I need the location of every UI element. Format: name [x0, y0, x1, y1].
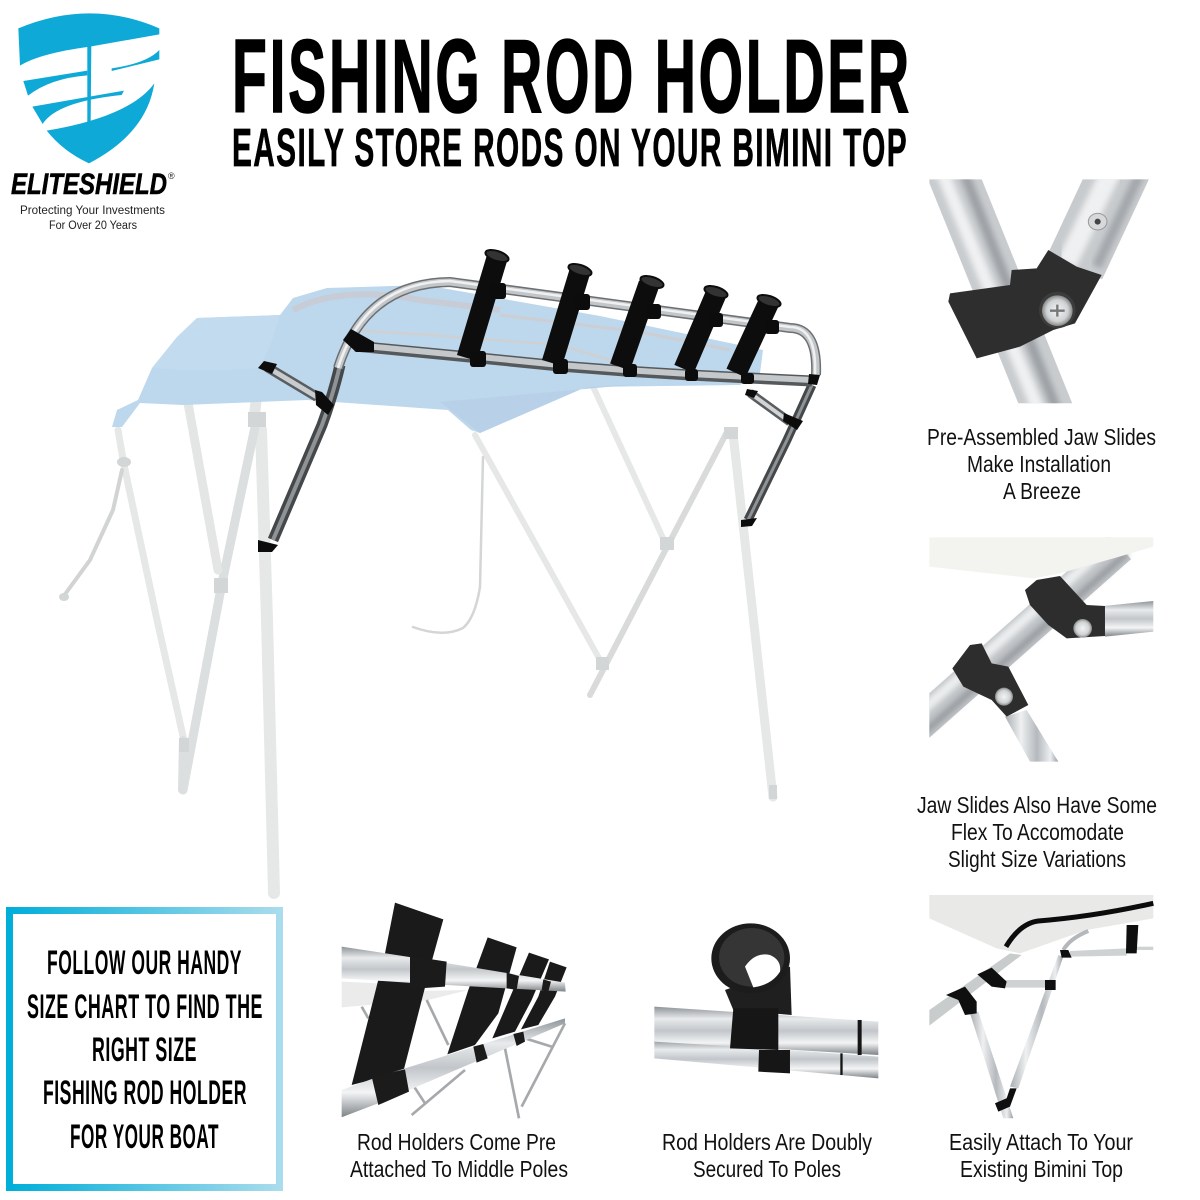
clips — [730, 1008, 862, 1075]
photo: rod holder attached under bimini — [929, 895, 1153, 1118]
photo: rod holder top view — [654, 923, 878, 1078]
caption: jaw slides: Pre-Assembled Jaw Slides — [927, 424, 1156, 450]
holder interior — [719, 928, 784, 987]
photo: rod holders on poles — [342, 903, 567, 1118]
curved bow — [1063, 931, 1088, 950]
icon: shield — [18, 13, 159, 163]
lower tube — [355, 345, 812, 381]
left pole — [940, 163, 1063, 427]
right pole — [1067, 163, 1143, 267]
holder rim — [711, 923, 790, 993]
black clips — [946, 925, 1138, 1112]
holder hole — [745, 954, 780, 987]
caption: flex — [917, 792, 1157, 872]
screw cross — [1050, 305, 1065, 317]
caption: easily attach — [949, 1129, 1133, 1182]
rod holder tubes — [467, 258, 769, 373]
caption: easily attach: Easily Attach To Your — [949, 1129, 1133, 1155]
callout text: RIGHT SIZE — [92, 1031, 197, 1069]
caption: pre attached — [350, 1129, 568, 1182]
clips — [372, 956, 551, 1105]
caption: jaw slides: A Breeze — [1003, 478, 1081, 504]
caption: easily attach: Existing Bimini Top — [960, 1156, 1123, 1182]
holder body — [725, 967, 792, 1015]
crossbars — [1000, 947, 1153, 988]
screw upper — [1073, 619, 1092, 638]
caption: flex: Slight Size Variations — [948, 846, 1126, 872]
canopy — [929, 537, 1153, 578]
holders — [352, 903, 567, 1085]
caption: flex: Flex To Accomodate — [951, 819, 1124, 845]
pivot hole centre — [1095, 219, 1101, 225]
caption: doubly secured — [662, 1129, 872, 1182]
caption: jaw slides — [927, 424, 1156, 504]
brand name: ELITESHIELD — [11, 168, 167, 201]
canopy behind — [342, 982, 468, 1007]
caption: jaw slides: Make Installation — [967, 451, 1111, 477]
front strut — [970, 1012, 1013, 1118]
caption: pre attached: Rod Holders Come Pre — [357, 1129, 556, 1155]
screw head — [1042, 295, 1073, 326]
lower bracket — [952, 643, 1028, 717]
aluminium frame and rod holders — [258, 248, 820, 552]
jaw slide bracket — [948, 250, 1102, 358]
thin struts — [362, 1000, 565, 1118]
diagonal pole — [913, 543, 1127, 733]
callout text — [27, 944, 263, 1156]
upper pole — [654, 1007, 878, 1055]
screw lower — [995, 688, 1013, 706]
upper bracket — [1025, 576, 1105, 638]
logo: EliteShield — [11, 13, 175, 232]
faded joints — [59, 412, 777, 799]
callout: size chart — [10, 910, 280, 1188]
caption: pre attached: Attached To Middle Poles — [350, 1156, 568, 1182]
photo: two jaw slides on pole — [913, 537, 1153, 762]
rod holder openings — [484, 248, 782, 309]
clips — [258, 283, 820, 552]
photo: jaw slide close-up — [940, 163, 1143, 427]
faded bimini frame — [63, 373, 773, 893]
lower pole — [1005, 710, 1058, 762]
canopy black piping — [1006, 903, 1153, 947]
callout frame — [10, 910, 280, 1188]
screw — [1039, 292, 1076, 328]
cross pole — [1103, 601, 1153, 637]
callout text: FISHING ROD HOLDER — [43, 1074, 247, 1112]
screw hole — [1088, 213, 1107, 230]
canopy — [929, 895, 1153, 953]
caption: flex: Jaw Slides Also Have Some — [917, 792, 1157, 818]
rear strut — [1010, 955, 1063, 1088]
tagline: Protecting Your Investments — [20, 205, 165, 217]
front strut — [273, 365, 812, 540]
callout text: SIZE CHART TO FIND THE — [27, 988, 263, 1026]
upper tube — [338, 281, 816, 375]
callout text: FOR YOUR BOAT — [70, 1118, 219, 1156]
main pole — [929, 953, 1022, 1026]
lower pole — [654, 1040, 878, 1078]
faded canopy — [112, 285, 763, 433]
caption: doubly secured: Secured To Poles — [693, 1156, 841, 1182]
lower pole — [342, 1018, 565, 1117]
callout text: FOLLOW OUR HANDY — [47, 944, 242, 982]
caption: doubly secured: Rod Holders Are Doubly — [662, 1129, 872, 1155]
tagline second line: For Over 20 Years — [49, 220, 137, 232]
registered mark: ® — [168, 171, 175, 181]
main illustration: rod holder on bimini top — [59, 248, 820, 893]
side braces — [267, 367, 790, 422]
upper pole — [342, 947, 566, 992]
